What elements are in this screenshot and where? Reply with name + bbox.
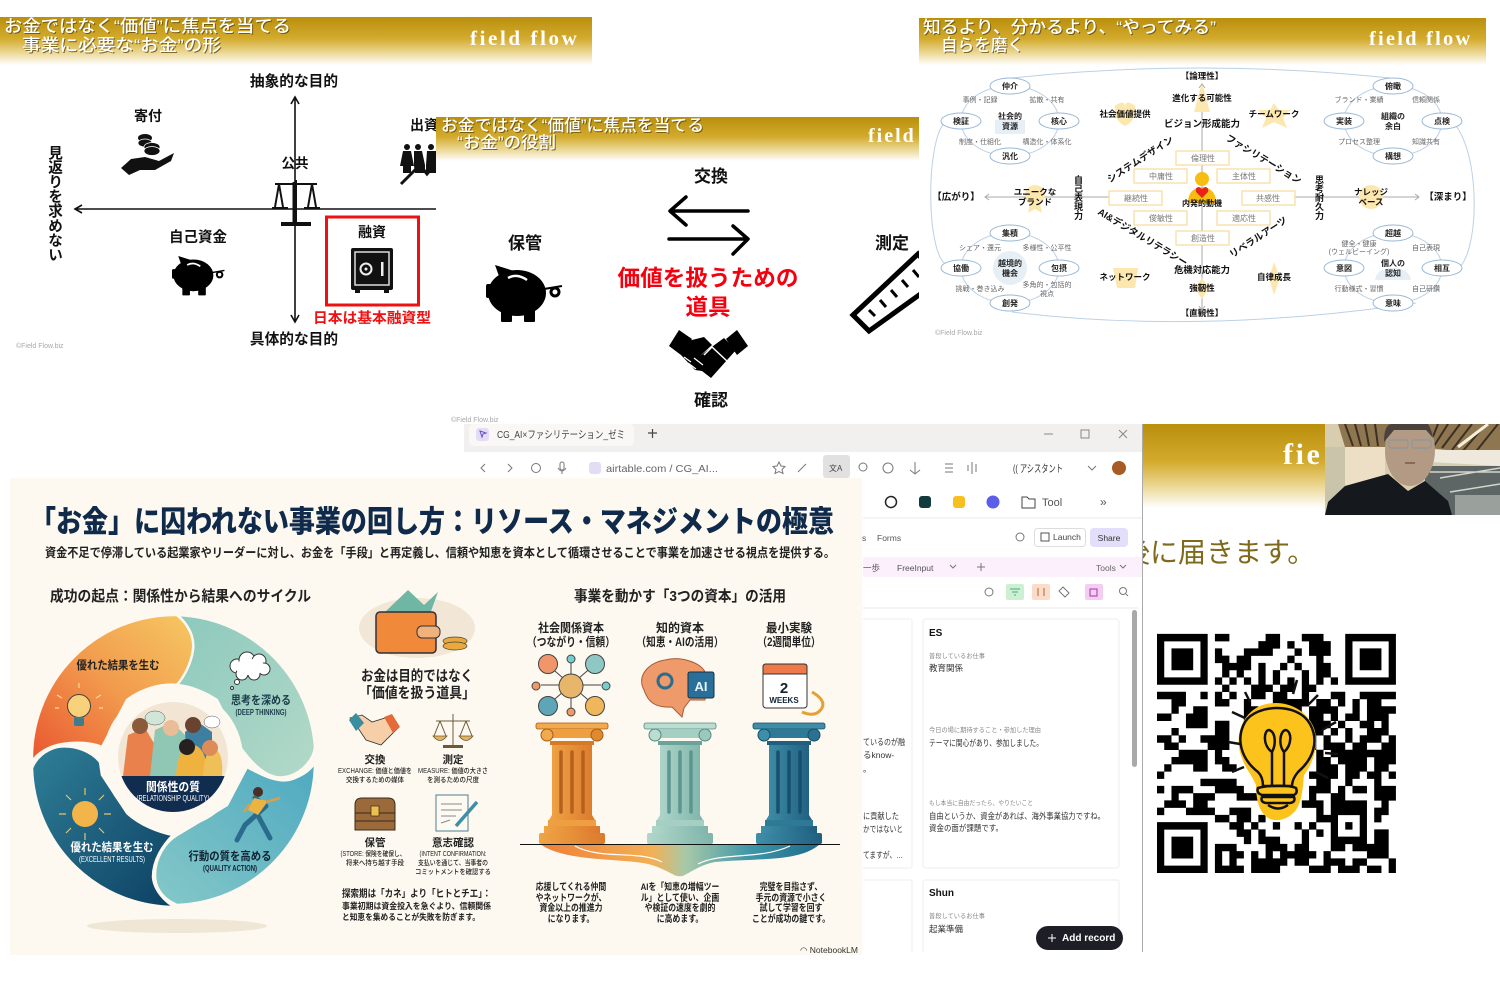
bottom right cycle: personal cognition: 相互 bbox=[1434, 263, 1450, 273]
cycle segment: dark blue bbox=[32, 746, 175, 907]
center attribute labels: 中庸性 bbox=[1149, 171, 1173, 181]
confirm label: 確認 bbox=[694, 391, 728, 410]
segment labels: (QUALITY ACTION) bbox=[203, 864, 257, 873]
view tabs row: FreeInput bbox=[897, 563, 934, 573]
left partial card: に貢献した bbox=[863, 811, 899, 821]
outer feedback loop bbox=[931, 68, 1474, 322]
center illustration bbox=[118, 702, 228, 821]
QR code bbox=[1157, 638, 1396, 869]
intent confirmation item: 意志確認 bbox=[432, 836, 474, 849]
segment labels: 優れた結果を生む bbox=[76, 658, 160, 672]
map labels: 進化する可能性 bbox=[1172, 93, 1232, 103]
bottom right cycle: personal cognition: 認知 bbox=[1385, 268, 1401, 278]
browser address bar: airtable.com / CG_AI... bbox=[606, 463, 718, 475]
card: Shun: Shun bbox=[929, 888, 954, 899]
NotebookLM infographic panel bbox=[10, 478, 862, 955]
map labels: 【直観性】 bbox=[1181, 308, 1223, 318]
bottom right cycle: personal cognition: 自己研鑽 bbox=[1412, 284, 1440, 293]
map labels: 社会価値提供 bbox=[1099, 109, 1151, 119]
measure label and ruler icon: 測定 bbox=[875, 234, 909, 253]
light bulb over QR bbox=[1228, 680, 1338, 820]
donation label and coin hand icon bbox=[121, 108, 174, 175]
card: ES bbox=[923, 619, 1119, 868]
center attribute labels: 倫理性 bbox=[1191, 153, 1215, 163]
store item: 保管 bbox=[364, 836, 386, 849]
center person with heart bbox=[1182, 172, 1222, 208]
top left cycle: social resources bbox=[941, 78, 1079, 164]
slide 2 header band: “お金”の役割 bbox=[457, 133, 556, 152]
bottom right cycle: personal cognition: 行動様式・習慣 bbox=[1334, 284, 1384, 293]
exchange item: 交換 bbox=[364, 753, 386, 766]
ground line and flowing foundation bbox=[520, 844, 840, 876]
icon: runner bbox=[237, 787, 280, 840]
capital column headings: 社会関係資本 bbox=[538, 620, 604, 635]
card: ES: 自由というか、資金があれば、海外事業協力ですね。 bbox=[929, 811, 1105, 821]
bookmark bar: » bbox=[1100, 495, 1107, 509]
pillar: teal bbox=[644, 723, 716, 844]
measure item: を測るための尺度 bbox=[427, 775, 479, 784]
ground shadow bbox=[87, 919, 267, 933]
icon: two week calendar: 2 bbox=[780, 680, 788, 697]
icon: brain with AI chip bbox=[642, 659, 714, 717]
top right cycle: organizational slack: 構想 bbox=[1385, 151, 1401, 161]
top left cycle: social resources: 社会的 bbox=[998, 111, 1022, 121]
top right cycle: organizational slack: 俯瞰 bbox=[1385, 81, 1401, 91]
top right cycle: organizational slack: 知識共有 bbox=[1412, 137, 1440, 146]
column 1 description bbox=[536, 880, 606, 924]
slide 3 header band: 知るより、分かるより、“やってみる” bbox=[923, 18, 1216, 37]
bottom right cycle: personal cognition: 健全・健康 bbox=[1342, 239, 1376, 248]
icon: two week calendar bbox=[763, 664, 823, 714]
bottom left cycle: cross-border opportunity: 多様性・公平性 bbox=[1022, 243, 1072, 252]
center attribute labels: 主体性 bbox=[1232, 171, 1256, 181]
column 2 description: に高めます。 bbox=[657, 912, 703, 924]
segment labels: (EXCELLENT RESULTS) bbox=[79, 855, 145, 864]
browser tab strip bbox=[464, 424, 1142, 452]
store label and piggy icon: 保管 bbox=[508, 233, 542, 253]
segment labels: 行動の質を高める bbox=[188, 849, 272, 863]
slide: try it yourself skill map bbox=[919, 18, 1486, 337]
center person with heart: 内発的動機 bbox=[1182, 198, 1222, 208]
cycle segment: orange bbox=[32, 615, 193, 762]
column 3 description: 完璧を目指さず、 bbox=[760, 880, 822, 892]
right section heading: 事業を動かす「3つの資本」の活用 bbox=[574, 587, 786, 605]
top right cycle: organizational slack: 組織の bbox=[1381, 111, 1405, 121]
filter tool icons bbox=[863, 584, 1138, 608]
column 3 description: 手元の資源で小さく bbox=[756, 891, 826, 903]
slide: forms of money needed for business bbox=[0, 17, 592, 350]
map labels: ユニークな bbox=[1014, 187, 1057, 197]
map labels: システムデザイン bbox=[1105, 133, 1176, 185]
capital column headings: （2週間単位） bbox=[758, 634, 820, 649]
bottom right cycle: personal cognition bbox=[1324, 225, 1462, 311]
top left cycle: social resources: 仲介 bbox=[1002, 81, 1018, 91]
left partial card: てますが、… bbox=[863, 850, 903, 860]
own funds label and piggy icon bbox=[169, 228, 227, 295]
vertical and horizontal axes bbox=[75, 97, 437, 322]
donation label and coin hand icon: 寄付 bbox=[134, 108, 162, 124]
slide header band: 事業に必要な“お金”の形 bbox=[22, 36, 221, 55]
icon: two week calendar: WEEKS bbox=[769, 696, 799, 705]
top right cycle: organizational slack: 実装 bbox=[1336, 116, 1352, 126]
map labels: 自律成長 bbox=[1257, 272, 1291, 282]
copyright: ©Field Flow.biz bbox=[935, 329, 983, 337]
column 1 description: やネットワークが、 bbox=[536, 891, 606, 903]
center message: 価値を扱うための bbox=[618, 266, 798, 291]
bottom left cycle: cross-border opportunity: シェア・還元 bbox=[959, 243, 1001, 252]
left section heading: 成功の起点：関係性から結果へのサイクル bbox=[50, 587, 311, 605]
bottom left cycle: cross-border opportunity: 多角的・包括的 bbox=[1022, 280, 1072, 289]
investment label and people icon: 出資 bbox=[410, 117, 438, 133]
map labels: ナレッジ bbox=[1354, 187, 1388, 197]
card: ES: もし本当に自由だったら、やりたいこと bbox=[929, 798, 1033, 807]
center attribute labels: 継続性 bbox=[1124, 193, 1148, 203]
top right cycle: organizational slack: プロセス整理 bbox=[1338, 137, 1380, 146]
icon: brain with AI chip: AI bbox=[694, 679, 708, 694]
map labels: リベラルアーツ bbox=[1228, 215, 1289, 261]
exchange label and arrows bbox=[669, 167, 748, 254]
bookmark bar bbox=[863, 495, 1142, 518]
handshake icon bbox=[669, 330, 748, 378]
public label and scale icon bbox=[272, 156, 320, 226]
view tabs row: 一歩 bbox=[863, 563, 881, 573]
card: ES: 資金の面が課題です。 bbox=[929, 823, 1003, 833]
NotebookLM credit: ◠ NotebookLM bbox=[800, 945, 858, 955]
map labels: 【広がり】 bbox=[932, 191, 980, 203]
bottom left cycle: cross-border opportunity: 創発 bbox=[1002, 298, 1018, 308]
person bbox=[1325, 414, 1452, 515]
pillar: orange bbox=[536, 723, 608, 844]
column 1 description: になります。 bbox=[548, 913, 594, 924]
app toolbar: Launch bbox=[1053, 532, 1081, 542]
exchange item: EXCHANGE: 価値と価値を bbox=[338, 766, 412, 775]
slide 2 header band: field bbox=[868, 125, 916, 147]
browser address bar: 文A bbox=[829, 463, 843, 473]
measure item: 測定 bbox=[442, 753, 464, 766]
left partial card: 。 bbox=[863, 764, 872, 774]
cycle segment: light teal bbox=[177, 615, 315, 777]
measure label and ruler icon bbox=[850, 234, 919, 334]
add record button: Add record bbox=[1062, 933, 1115, 944]
top right cycle: organizational slack: ブランド・業績 bbox=[1334, 95, 1384, 104]
intent confirmation item bbox=[415, 795, 491, 876]
map labels: 自己表現力 bbox=[1073, 174, 1083, 221]
top left cycle: social resources: 拡散・共有 bbox=[1030, 95, 1064, 104]
slide header band: お金ではなく“価値”に焦点を当てる bbox=[4, 17, 291, 36]
store item: 将来へ持ち越す手段 bbox=[346, 858, 404, 867]
top left cycle: social resources: 汎化 bbox=[1002, 151, 1018, 161]
browser address bar: (( アシスタント bbox=[1013, 463, 1063, 475]
left partial card: かではないと bbox=[863, 824, 903, 834]
app toolbar: Forms bbox=[877, 533, 901, 543]
top left cycle: social resources: 制度・仕組化 bbox=[959, 137, 1001, 146]
center attribute labels: 適応性 bbox=[1232, 213, 1256, 223]
hub bbox=[103, 688, 243, 828]
card: ES: 教育関係 bbox=[929, 663, 963, 673]
slide: roles of money bbox=[436, 116, 940, 424]
slide 3 header band: 自らを磨く bbox=[941, 36, 1024, 55]
header band with logo: fie bbox=[1283, 438, 1322, 471]
pillar: blue bbox=[753, 723, 825, 844]
card: Shun: 普段しているお仕事 bbox=[929, 911, 985, 920]
slide 2 header band bbox=[436, 116, 919, 161]
capital column headings: 最小実験 bbox=[766, 620, 812, 635]
segment labels: 思考を深める bbox=[231, 693, 291, 707]
store item bbox=[340, 798, 406, 867]
column 1 description: 資金以上の推進力 bbox=[540, 901, 602, 913]
map labels: ファシリテーション bbox=[1224, 133, 1303, 187]
hub speech bubbles bbox=[145, 711, 220, 728]
bottom left cycle: cross-border opportunity: 協働 bbox=[953, 263, 969, 273]
store label and piggy icon bbox=[486, 233, 562, 322]
money is a tool heading: 「価値を扱う道具」 bbox=[359, 684, 475, 702]
column 2 description bbox=[641, 880, 720, 924]
bottom right cycle: personal cognition: 個人の bbox=[1381, 258, 1405, 268]
map labels: ベース bbox=[1358, 197, 1384, 207]
bottom left cycle: cross-border opportunity: 包摂 bbox=[1051, 263, 1067, 273]
left partial card: るknow- bbox=[863, 750, 894, 760]
bottom left cycle: cross-border opportunity: 越境的 bbox=[998, 258, 1022, 268]
bottom right cycle: personal cognition: (ウェルビーイング) bbox=[1329, 247, 1389, 256]
intent confirmation item: (INTENT CONFIRMATION: bbox=[420, 851, 487, 858]
bottom left cycle: cross-border opportunity: 集積 bbox=[1002, 228, 1018, 238]
browser tab strip: CG_AI×ファシリテーション_ゼミ bbox=[497, 429, 625, 441]
top right cycle: organizational slack: 信頼関係 bbox=[1412, 95, 1440, 104]
axis label left vertical: 見返りを求めない bbox=[46, 145, 62, 262]
exploration stage note: 探索期は「カネ」より「ヒトとチエ」： bbox=[342, 887, 491, 900]
view tabs row bbox=[863, 557, 1142, 577]
app toolbar: s bbox=[862, 533, 866, 543]
bottom right cycle: personal cognition: 自己表現 bbox=[1412, 243, 1440, 252]
exploration stage note bbox=[342, 887, 491, 922]
left partial card: ているのが融 bbox=[863, 737, 905, 747]
column 1 description: 応援してくれる仲間 bbox=[536, 880, 606, 892]
map labels: 【深まり】 bbox=[1424, 191, 1472, 203]
exchange label and arrows: 交換 bbox=[694, 167, 728, 186]
column 3 description: ことが成功の鍵です。 bbox=[752, 912, 830, 924]
bottom right cycle: personal cognition: 意図 bbox=[1336, 263, 1352, 273]
top left cycle: social resources: 検証 bbox=[953, 116, 969, 126]
bottom right cycle: personal cognition: 超越 bbox=[1385, 228, 1401, 238]
message text: 後に届きます。 bbox=[1122, 537, 1315, 568]
loan highlighted box with safe icon bbox=[326, 217, 418, 305]
bottom left cycle: cross-border opportunity: 視点 bbox=[1040, 289, 1054, 298]
slide 3 header band: field flow bbox=[1369, 28, 1472, 50]
measure item bbox=[418, 714, 488, 784]
segment labels bbox=[70, 658, 291, 873]
capital column headings: （つながり・信頼） bbox=[527, 634, 615, 649]
intent confirmation item: 支払いを通じて、当事者の bbox=[418, 858, 488, 867]
center message bbox=[618, 266, 798, 320]
card: Shun: 起業準備 bbox=[929, 924, 963, 934]
copyright: ©Field Flow.biz bbox=[16, 342, 64, 350]
slide 2 header band: お金ではなく“価値”に焦点を当てる bbox=[441, 116, 704, 135]
add record button bbox=[1036, 926, 1123, 950]
card: ES: 普段しているお仕事 bbox=[929, 651, 985, 660]
money is a tool heading: お金は目的ではなく bbox=[361, 667, 473, 685]
map labels: ブランド bbox=[1018, 197, 1052, 207]
icon: network of people bbox=[532, 654, 610, 716]
center attribute labels bbox=[1124, 153, 1280, 243]
map labels: 【論理性】 bbox=[1181, 71, 1223, 81]
axis label bottom: 具体的な目的 bbox=[250, 330, 338, 348]
center labels: 関係性の質 bbox=[146, 779, 200, 794]
store item: (STORE: 保険を確保し、 bbox=[340, 849, 406, 858]
slide: QR code page bbox=[1142, 424, 1396, 952]
column 2 description: や検証の速度を劇的 bbox=[645, 901, 716, 913]
exploration stage note: 事業初期は資金投入を急ぐより、信頼関係 bbox=[342, 901, 491, 911]
bottom left cycle: cross-border opportunity bbox=[941, 225, 1079, 311]
column 2 description: ル」として使い、企画 bbox=[641, 891, 720, 903]
yellow background shapes bbox=[1025, 82, 1383, 299]
center sublabel: (RELATIONSHIP QUALITY) bbox=[136, 794, 210, 803]
money is a tool heading bbox=[359, 667, 475, 702]
capital column headings: 知的資本 bbox=[656, 620, 704, 635]
card: ES: 今日の場に期待すること・参加した理由 bbox=[929, 725, 1041, 734]
investment label and people icon bbox=[400, 117, 438, 184]
header band with logo bbox=[1143, 424, 1500, 508]
slide header band bbox=[0, 17, 592, 65]
browser window: airtable bbox=[464, 424, 1142, 952]
top left cycle: social resources: 資源 bbox=[1002, 121, 1018, 131]
column 2 description: AIを「知恵の増幅ツー bbox=[641, 880, 719, 892]
app toolbar: Share bbox=[1098, 533, 1121, 543]
top left cycle: social resources: 事例・記録 bbox=[962, 95, 998, 104]
slide 3 header band bbox=[919, 18, 1486, 65]
main title: 「お金」に囚われない事業の回し方：リソース・マネジメントの極意 bbox=[30, 506, 834, 539]
map labels: 強靭性 bbox=[1189, 283, 1215, 293]
bottom right cycle: personal cognition: 意味 bbox=[1385, 298, 1401, 308]
icon: thought cloud bbox=[230, 652, 270, 690]
map labels: ビジョン形成能力 bbox=[1164, 118, 1240, 130]
bottom left cycle: cross-border opportunity: 挑戦・巻き込み bbox=[956, 284, 1004, 293]
view tabs row: Tools bbox=[1096, 563, 1116, 573]
cycle segment: blue teal bbox=[155, 762, 315, 905]
segment labels: 優れた結果を生む bbox=[70, 840, 154, 854]
axis label top: 抽象的な目的 bbox=[250, 72, 338, 90]
icon: sun bbox=[59, 788, 111, 840]
card: Shun bbox=[923, 880, 1119, 952]
slide header band: field flow bbox=[470, 26, 579, 50]
glass office room bbox=[1425, 466, 1500, 515]
center attribute labels: 俊敏性 bbox=[1149, 213, 1173, 223]
top right cycle: organizational slack: 余白 bbox=[1385, 121, 1401, 131]
intent confirmation item: コミットメントを確認する bbox=[415, 867, 491, 876]
webcam video overlay bbox=[1325, 414, 1500, 515]
ceiling slats bbox=[1338, 424, 1500, 450]
card: ES: ES bbox=[929, 628, 943, 639]
subtitle: 資金不足で停滞している起業家やリーダーに対し、お金を「手段」と再定義し、信頼や知恵を資本として循環させることで事業を加速させる視点を提供する。 bbox=[45, 545, 835, 560]
bottom left cycle: cross-border opportunity: 機会 bbox=[1002, 268, 1018, 278]
column 3 description: 試して学習を回す bbox=[760, 901, 823, 913]
map labels: 危機対応能力 bbox=[1174, 264, 1230, 275]
own funds label and piggy icon: 自己資金 bbox=[169, 228, 227, 246]
center attribute labels: 共感性 bbox=[1256, 193, 1280, 203]
map labels: 思考耐久力 bbox=[1314, 175, 1324, 221]
top left cycle: social resources: 核心 bbox=[1051, 116, 1067, 126]
segment labels: (DEEP THINKING) bbox=[236, 708, 287, 717]
left partial card bbox=[863, 619, 912, 952]
bookmark bar: Tool bbox=[1042, 497, 1062, 509]
app toolbar bbox=[862, 528, 1128, 547]
footer copyright: ©Field Flow.biz bbox=[451, 416, 499, 424]
central cross axes bbox=[985, 85, 1419, 310]
capital column headings: （知恵・AIの活用） bbox=[636, 634, 724, 649]
top right cycle: organizational slack: 点検 bbox=[1434, 116, 1450, 126]
column 3 description bbox=[752, 880, 830, 924]
map labels: ネットワーク bbox=[1099, 272, 1151, 282]
card: ES: テーマに関心があり、参加しました。 bbox=[929, 738, 1043, 748]
exchange item: 交換するための媒体 bbox=[346, 775, 404, 784]
map labels bbox=[932, 71, 1472, 318]
map labels: AI&デジタルリテラシー bbox=[1096, 206, 1190, 269]
pillar and beam bbox=[1325, 447, 1500, 502]
loan highlighted box with safe icon: 融資 bbox=[358, 224, 386, 240]
capital column headings bbox=[527, 620, 820, 649]
icon: light bulb bbox=[55, 683, 103, 726]
exchange item bbox=[338, 713, 412, 784]
center attribute labels: 創造性 bbox=[1191, 233, 1215, 243]
public label and scale icon: 公共 bbox=[282, 156, 308, 171]
wallet illustration bbox=[359, 590, 475, 658]
exploration stage note: と知恵を集めることが失敗を防ぎます。 bbox=[342, 912, 480, 922]
red caption: 日本は基本融資型 bbox=[313, 309, 431, 327]
arrows end tips bbox=[985, 84, 1419, 310]
top left cycle: social resources: 構造化・体系化 bbox=[1022, 137, 1072, 146]
cycle diagram bbox=[32, 615, 315, 933]
scrollbar bbox=[1132, 610, 1137, 767]
browser address bar bbox=[464, 452, 1142, 484]
map labels: チームワーク bbox=[1249, 109, 1299, 119]
top right cycle: organizational slack bbox=[1324, 78, 1462, 164]
center attribute boxes bbox=[1109, 151, 1295, 245]
measure item: MEASURE: 価値の大きさ bbox=[418, 766, 488, 775]
center message: 道具 bbox=[685, 295, 731, 320]
